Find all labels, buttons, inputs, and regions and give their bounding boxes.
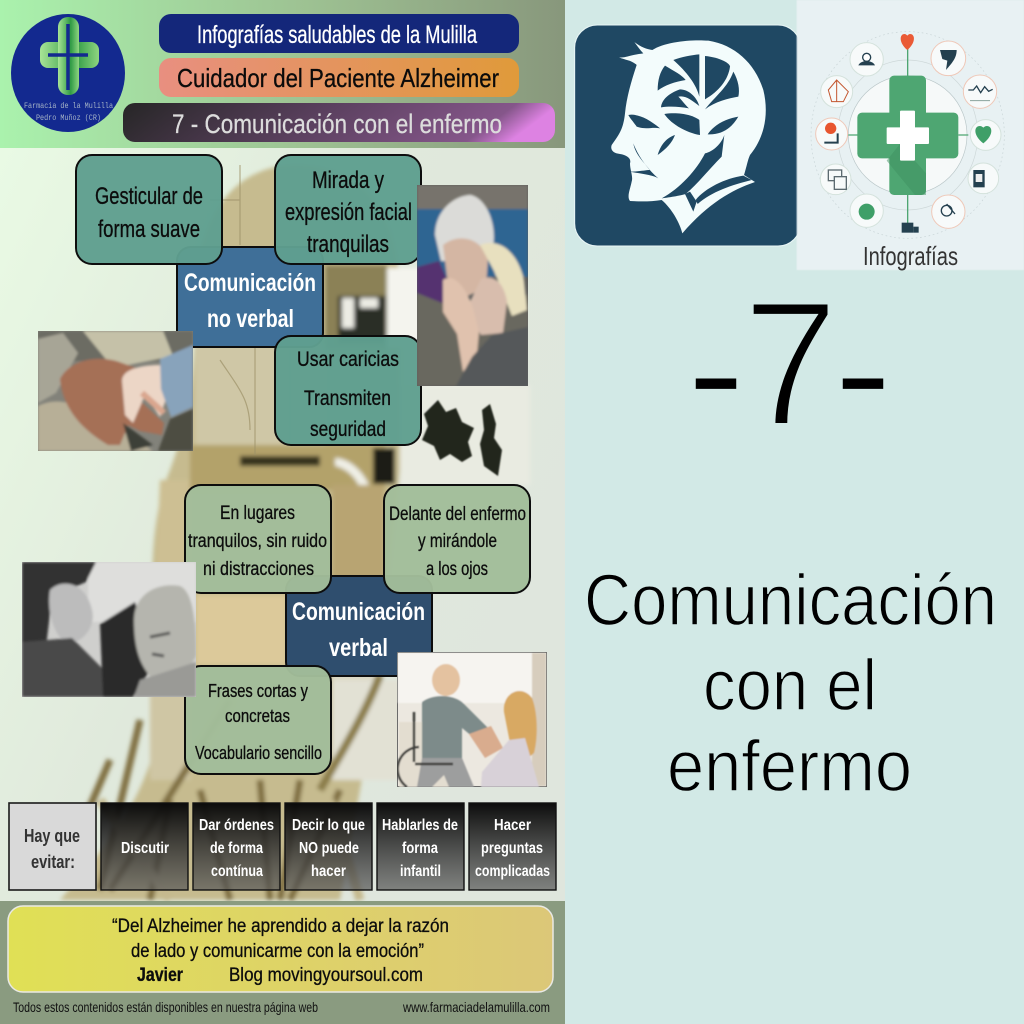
title pill: Cuidador del Paciente Alzheimer (159, 58, 519, 97)
box: Hablarles de forma infantil: forma (402, 840, 438, 857)
box: Hablarles de forma infantil: infantil (400, 863, 441, 880)
panel: things to avoid (9, 803, 556, 890)
box: Frases cortas y concretas (185, 666, 331, 774)
big number: -7-: 7 (743, 264, 838, 463)
box: Discutir: Discutir (121, 840, 169, 857)
footer band (0, 901, 565, 1024)
node: Comunicación no verbal: no verbal (207, 305, 294, 333)
big title: Comunicación con el enfermo: con el (703, 646, 877, 726)
box: Discutir (101, 803, 188, 890)
icon: head with brain tree (575, 25, 801, 246)
node: Comunicación no verbal: Comunicación (184, 269, 316, 297)
box: En lugares tranquilos: ni distracciones (203, 559, 314, 580)
big number: -7-: - (686, 270, 746, 469)
title pill: 7 - Comunicación con el enfermo: 7 - Comunicación con el enfermo (172, 109, 502, 139)
box: Hay que evitar: Hay que (24, 826, 80, 846)
box: Hacer preguntas complicadas: Hacer (494, 817, 531, 834)
box: Usar caricias: Usar caricias (297, 348, 399, 371)
box: Dar órdenes: de forma (210, 840, 263, 857)
quote box: “Del Alzheimer he aprendido a dejar la razón (112, 916, 449, 937)
photo: carer with man in wheelchair (397, 652, 547, 787)
icon circles (816, 41, 1001, 228)
node: Comunicación no verbal (177, 247, 323, 347)
photo: girl talking with elderly woman (22, 562, 196, 697)
box: Gesticular de forma suave: forma suave (98, 216, 200, 243)
logo: Farmacia de la Mulilla (11, 14, 125, 132)
title pill: Cuidador del Paciente Alzheimer: Cuidador del Paciente Alzheimer (177, 63, 499, 93)
box: Hacer preguntas complicadas: preguntas (481, 840, 543, 857)
big number: -7- (686, 264, 893, 469)
box: Delante del enfermo: a los ojos (426, 559, 488, 580)
photo: elderly couple embracing (417, 185, 528, 386)
box: Decir lo que NO puede hacer (285, 803, 372, 890)
box: Delante del enfermo: y mirándole (418, 531, 497, 552)
box: Decir lo que NO puede hacer: NO puede (299, 840, 359, 857)
node: Comunicación verbal: verbal (329, 634, 388, 662)
logo: Farmacia de la Mulilla: Farmacia de la Mulilla (24, 101, 113, 111)
box: Dar órdenes (193, 803, 280, 890)
footer text: contenidos: Todos estos contenidos están disponibles en nuestra página web (13, 999, 318, 1015)
box: Hablarles de forma infantil: Hablarles de (382, 817, 458, 834)
box: Dar órdenes: contínua (211, 863, 263, 880)
node: Comunicación verbal: Comunicación (292, 598, 425, 626)
quote box (8, 906, 553, 992)
node: Comunicación verbal (286, 576, 432, 676)
box: Decir lo que NO puede hacer: Decir lo que (292, 817, 365, 834)
title pill: Infografías saludables: Infografías saludables de la Mulilla (197, 21, 477, 49)
box: Mirada y expresión facial: Mirada y (312, 167, 384, 194)
box: Usar caricias: Transmiten (304, 387, 391, 410)
footer text: web address: www.farmaciadelamulilla.com (402, 999, 550, 1015)
box: Delante del enfermo: Delante del enfermo (389, 504, 526, 525)
box: Hablarles de forma infantil (377, 803, 464, 890)
box: Usar caricias (275, 336, 421, 445)
box: Hay que evitar (9, 803, 96, 890)
box: Gesticular de forma suave (76, 155, 222, 264)
big title: Comunicación con el enfermo (584, 561, 997, 807)
box: En lugares tranquilos: En lugares (220, 503, 295, 524)
heading: Infografías: Infografías (863, 241, 958, 271)
main body background (0, 148, 565, 901)
big number: -7-: - (833, 270, 893, 469)
box: Dar órdenes: Dar órdenes (199, 817, 274, 834)
box: Decir lo que NO puede hacer: hacer (311, 863, 346, 880)
box: Frases cortas y concretas: Vocabulario sencillo (195, 743, 322, 763)
box: Mirada y expresión facial: tranquilas (307, 231, 389, 258)
box: Hay que evitar: evitar: (31, 852, 75, 872)
box: Hacer preguntas complicadas (469, 803, 556, 890)
box: Delante del enfermo (384, 485, 530, 593)
background photo: blurred head with puzzle (60, 165, 530, 900)
quote box: Blog movingyoursoul.com (229, 965, 423, 986)
box: Mirada y expresión facial (275, 155, 421, 264)
box: Hacer preguntas complicadas: complicadas (475, 863, 550, 880)
box: Frases cortas y concretas: concretas (225, 706, 290, 726)
big title: Comunicación con el enfermo: enfermo (667, 727, 912, 807)
box: Mirada y expresión facial: expresión facial (285, 199, 412, 226)
logo: Farmacia de la Mulilla: Pedro Muñoz (CR) (36, 113, 101, 123)
box: Gesticular de forma suave: Gesticular de (95, 183, 203, 210)
panel: infographic left column (0, 0, 565, 1024)
header band (0, 0, 565, 148)
quote box: de lado y comunicarme con la emoción” (131, 941, 424, 962)
right panel background (565, 0, 1024, 1024)
small icon glyphs (824, 34, 993, 233)
box: Usar caricias: seguridad (310, 418, 386, 441)
box: En lugares tranquilos: tranquilos, sin ruido (188, 531, 327, 552)
green cross (857, 76, 958, 195)
title pill: 7 - Comunicación con el enfermo (123, 103, 555, 142)
photo: hands of elder and child (38, 331, 193, 451)
box: En lugares tranquilos (185, 485, 331, 593)
title pill: Infografías saludables (159, 14, 519, 53)
box: Frases cortas y concretas: Frases cortas y (208, 681, 308, 701)
rings (811, 32, 1004, 238)
quote box: Javier (137, 965, 183, 986)
icon panel: health infographic emblem (797, 0, 1024, 270)
